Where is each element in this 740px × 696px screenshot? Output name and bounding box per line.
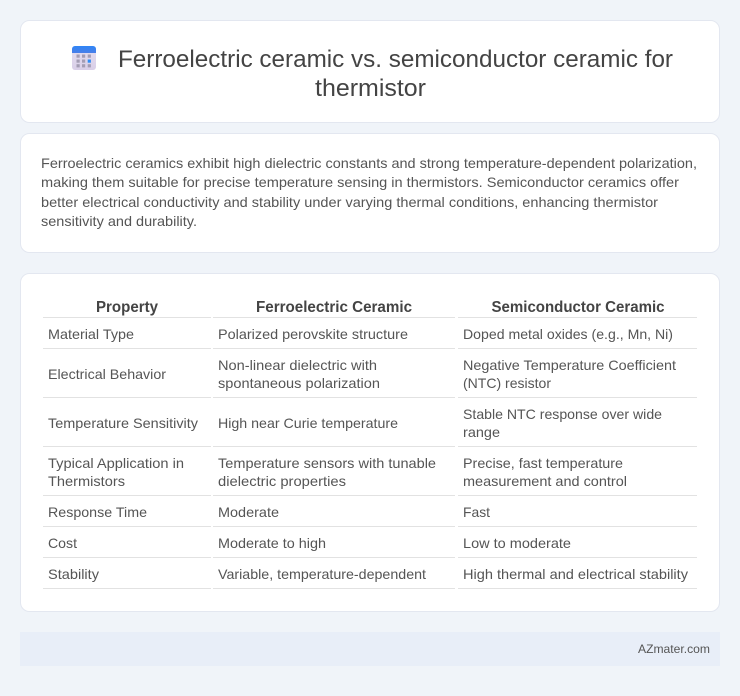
row: temperature sensitivity: Temperature Sensitivity (48, 415, 198, 431)
title text (118, 46, 673, 102)
table header: Property (96, 299, 158, 316)
panel: summary text: making them suitable for precise temperature sensing in thermistors. Semiconductor ceramics offer (41, 174, 679, 190)
panel: comparison table (20, 274, 720, 612)
panel: title (20, 20, 720, 122)
row: typical application: Typical Application in (48, 455, 184, 471)
row: stability: Variable, temperature-dependent (218, 566, 426, 582)
row: cost: Moderate to high (218, 535, 326, 551)
panel: summary text: Ferroelectric ceramics exhibit high dielectric constants and strong temperature-dependent polarization, (41, 155, 697, 171)
row: typical application: Temperature sensors with tunable (218, 455, 436, 471)
table header: Ferroelectric Ceramic (256, 299, 412, 316)
row: typical application: dielectric properties (218, 473, 346, 489)
row: material type: Doped metal oxides (e.g., Mn, Ni) (463, 326, 673, 342)
row: material type: Polarized perovskite structure (218, 326, 408, 342)
row: electrical behavior (43, 357, 697, 398)
row: material type: Material Type (48, 326, 134, 342)
row: response time: Moderate (218, 504, 279, 520)
panel: summary text: better electrical conductivity and stability under varying thermal conditions, enhancing thermistor (41, 194, 658, 210)
row: electrical behavior: spontaneous polarization (218, 375, 380, 391)
row: typical application: Precise, fast temperature (463, 455, 623, 471)
row: cost: Low to moderate (463, 535, 571, 551)
row: response time: Fast (463, 504, 490, 520)
row: electrical behavior: Negative Temperature Coefficient (463, 357, 676, 373)
panel: summary text: sensitivity and durability. (41, 213, 197, 229)
row: stability: High thermal and electrical stability (463, 566, 688, 582)
footer (20, 632, 720, 666)
row: temperature sensitivity: High near Curie temperature (218, 415, 398, 431)
row: response time: Response Time (48, 504, 147, 520)
row: typical application: measurement and control (463, 473, 627, 489)
row: temperature sensitivity (43, 406, 697, 447)
row: cost: Cost (48, 535, 77, 551)
icon: calendar (72, 46, 96, 70)
title text: thermistor (315, 75, 426, 102)
row: temperature sensitivity: range (463, 424, 500, 440)
row: electrical behavior: Non-linear dielectric with (218, 357, 377, 373)
title text: Ferroelectric ceramic vs. semiconductor ceramic for (118, 46, 673, 73)
row: material type (43, 326, 697, 349)
row: typical application (43, 455, 697, 496)
row: cost (43, 535, 697, 558)
row: stability: Stability (48, 566, 99, 582)
row: response time (43, 504, 697, 527)
row: typical application: Thermistors (48, 473, 125, 489)
row: temperature sensitivity: Stable NTC response over wide (463, 406, 662, 422)
row: stability (43, 566, 697, 589)
table header (43, 299, 697, 318)
footer: AZmater.com (638, 642, 710, 656)
row: electrical behavior: Electrical Behavior (48, 366, 166, 382)
panel: summary text (20, 134, 720, 252)
row: electrical behavior: (NTC) resistor (463, 375, 551, 391)
table header: Semiconductor Ceramic (492, 299, 665, 316)
